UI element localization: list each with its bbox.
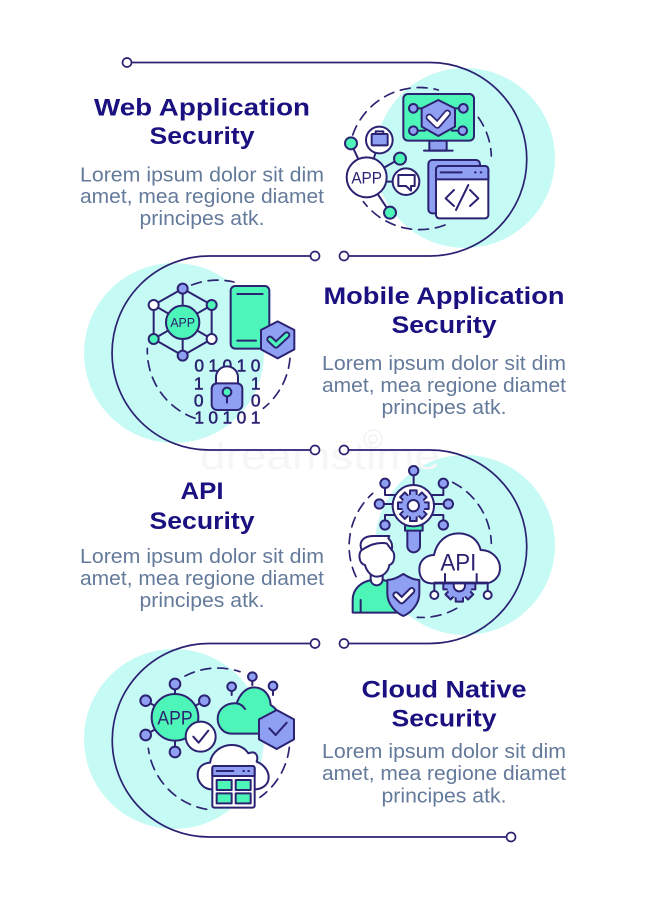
heading: API security: Security bbox=[150, 508, 255, 535]
text block: web application: Lorem ipsum dolor sit dim bbox=[80, 164, 324, 186]
text block: API: amet, mea regione diamet bbox=[80, 567, 324, 590]
heading: web application security: Security bbox=[150, 123, 255, 150]
text block: web application bbox=[80, 164, 324, 230]
text block: API bbox=[80, 545, 324, 612]
watermark: dreamstime bbox=[200, 436, 440, 478]
icon: cloud native security: APP bbox=[157, 709, 193, 730]
heading: mobile application security: Mobile Application bbox=[324, 283, 564, 310]
icon: mobile application security: 0 bbox=[251, 391, 260, 411]
connector line: mobile application bbox=[112, 252, 320, 454]
text block: cloud native bbox=[322, 740, 566, 808]
icon: API security bbox=[349, 466, 500, 617]
icon: mobile application security: 0 bbox=[194, 391, 203, 411]
icon: mobile application security: 01010 bbox=[194, 355, 260, 375]
background circle: web application bbox=[375, 68, 555, 248]
icon: web application security: APP bbox=[351, 168, 382, 187]
icon: cloud native security bbox=[140, 668, 294, 809]
text block: mobile application: principes atk. bbox=[382, 396, 506, 419]
icon: API security: API bbox=[440, 550, 476, 577]
text block: API: principes atk. bbox=[140, 589, 264, 612]
icon: mobile application security: 10101 bbox=[194, 407, 260, 427]
text block: mobile application: Lorem ipsum dolor sit dim bbox=[322, 352, 566, 375]
icon: web application security bbox=[345, 88, 491, 230]
text block: mobile application: amet, mea regione diamet bbox=[322, 374, 566, 397]
background circle: mobile application bbox=[84, 263, 264, 443]
icon: mobile application security bbox=[147, 280, 294, 427]
background circle: cloud native bbox=[84, 649, 264, 829]
connector line: API bbox=[340, 446, 527, 648]
text block: API: Lorem ipsum dolor sit dim bbox=[80, 545, 324, 568]
text block: cloud native: principes atk. bbox=[382, 784, 506, 808]
text block: cloud native: amet, mea regione diamet bbox=[322, 762, 566, 785]
heading: web application security: Web Application bbox=[94, 94, 310, 122]
heading: API security bbox=[150, 478, 255, 535]
heading: mobile application security bbox=[324, 283, 564, 339]
heading: cloud native security: Security bbox=[392, 706, 497, 732]
heading: cloud native security bbox=[362, 676, 526, 732]
icon: mobile application security: 1 bbox=[194, 373, 203, 393]
heading: cloud native security: Cloud Native bbox=[362, 676, 526, 704]
text block: web application: amet, mea regione diamet bbox=[80, 185, 324, 208]
connector line: cloud native bbox=[112, 639, 516, 842]
text block: web application: principes atk. bbox=[140, 207, 264, 230]
text block: cloud native: Lorem ipsum dolor sit dim bbox=[322, 740, 566, 763]
heading: mobile application security: Security bbox=[392, 312, 497, 339]
heading: API security: API bbox=[180, 478, 224, 505]
icon: mobile application security: 1 bbox=[251, 373, 260, 393]
heading: web application security bbox=[94, 94, 310, 150]
icon: mobile application security: APP bbox=[170, 316, 195, 330]
text block: mobile application bbox=[322, 352, 566, 419]
background circle: API bbox=[375, 455, 555, 635]
connector line: web application bbox=[122, 58, 527, 260]
